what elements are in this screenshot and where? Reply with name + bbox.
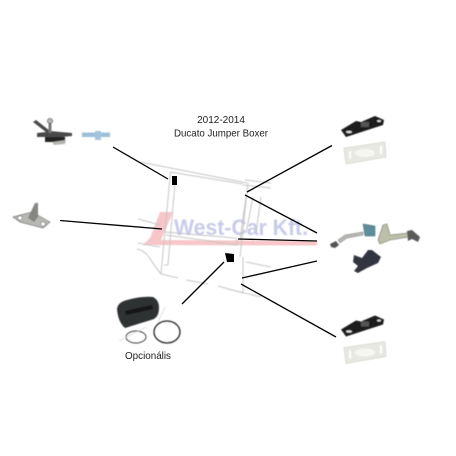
- watermark: West-Car Kft logo: [143, 212, 317, 246]
- title: 2012-2014: [197, 115, 245, 126]
- icon: door latch top left: [33, 118, 72, 145]
- door mount square upper: [172, 176, 177, 185]
- icon: right hinge: [378, 224, 420, 244]
- van outline drawing: [137, 162, 271, 297]
- icon: black door latch: [353, 250, 381, 273]
- icon: black striker with white plate top right: [341, 116, 386, 164]
- title: [174, 115, 269, 140]
- logo red mark: [143, 212, 317, 246]
- icon: blue pin: [82, 131, 110, 140]
- leader lines: [60, 146, 336, 337]
- label: optional: Opcionális: [125, 351, 171, 362]
- watermark text: West-Car Kft.: [174, 215, 308, 240]
- icon: black striker with white plate bottom right: [341, 316, 386, 364]
- icon: left hinge arm with teal bracket: [330, 224, 375, 248]
- door mount square lower: [225, 253, 234, 262]
- icon: door handle with cables: [117, 297, 180, 343]
- icon: striker plate left: [13, 203, 50, 228]
- title: Ducato Jumper Boxer: [174, 128, 269, 140]
